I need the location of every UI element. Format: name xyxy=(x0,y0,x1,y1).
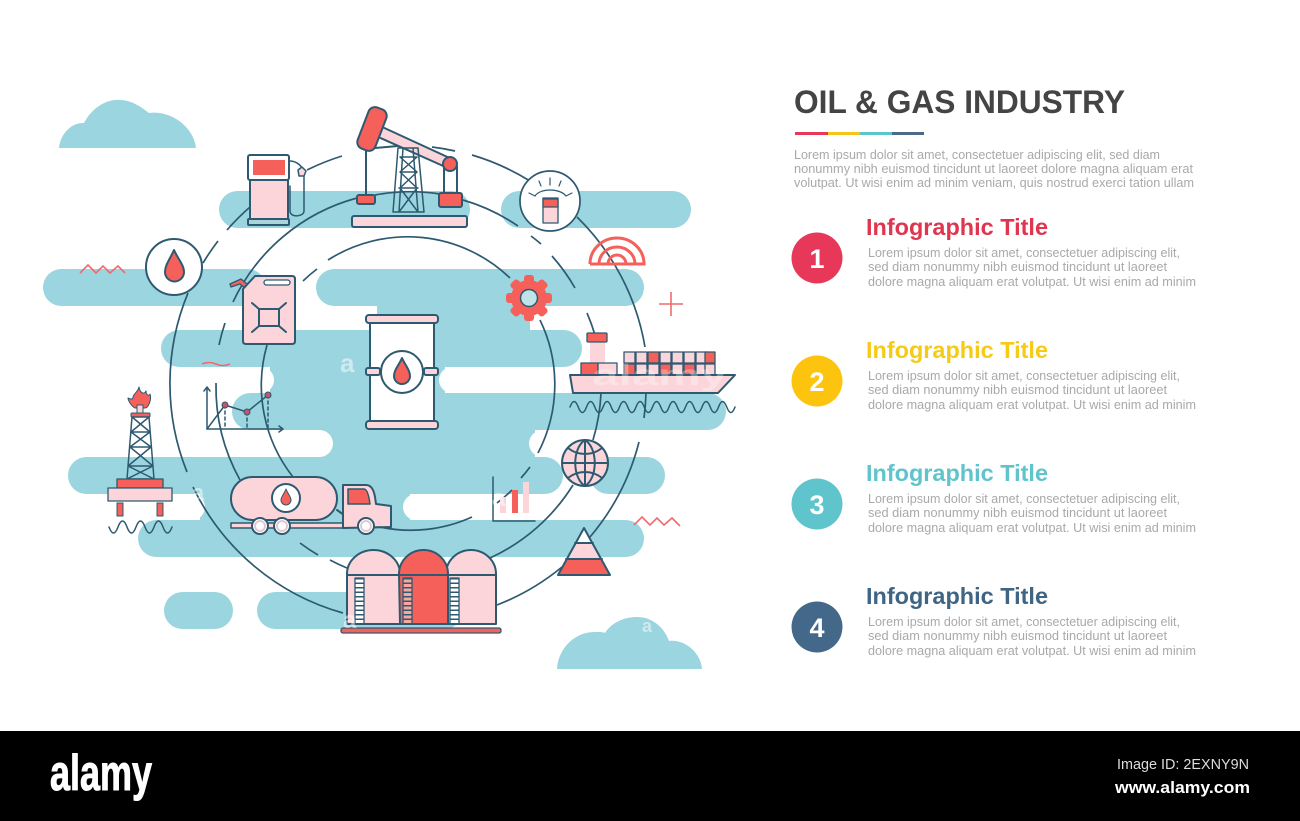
item 3: 3 xyxy=(809,490,825,520)
item 2: 2 xyxy=(809,367,825,397)
background: blue pill shapes xyxy=(43,191,739,629)
watermark marks: a xyxy=(192,480,205,505)
item 1: 1 xyxy=(809,244,825,274)
icon: water drop circle xyxy=(146,239,202,295)
icon: oil barrel xyxy=(366,315,438,429)
icon: globe xyxy=(562,440,608,486)
item 3: Infographic Title xyxy=(866,460,1048,486)
icon: tanker truck xyxy=(231,477,391,534)
item 1: Infographic Title xyxy=(866,214,1048,240)
intro paragraph: nonummy nibh euismod tincidunt ut laoreet dolore magna aliquam erat xyxy=(794,161,1193,176)
cloud: top left xyxy=(59,100,196,148)
icon: container ship xyxy=(570,333,735,412)
watermark marks: a xyxy=(343,607,357,634)
icon: signal arcs xyxy=(590,238,644,264)
icon: fuel pump xyxy=(248,155,306,225)
title: OIL & GAS INDUSTRY xyxy=(794,84,1125,120)
item 4: 4 xyxy=(809,613,825,643)
item 2 xyxy=(792,337,1196,412)
item 4: dolore magna aliquam erat volutpat. Ut wisi enim ad minim xyxy=(868,643,1196,658)
item 2: sed diam nonummy nibh euismod tincidunt ut laoreet xyxy=(868,382,1167,397)
title underline xyxy=(795,132,924,135)
icon: gauge with fuel pump xyxy=(520,171,580,231)
item 2: Infographic Title xyxy=(866,337,1048,363)
ring arcs connecting the icons xyxy=(170,147,646,613)
item 1: sed diam nonummy nibh euismod tincidunt ut laoreet xyxy=(868,259,1167,274)
item 4: Infographic Title xyxy=(866,583,1048,609)
footer band: www.alamy.com xyxy=(1114,778,1250,797)
icon: oil pumpjack xyxy=(352,105,467,227)
icon: bar chart xyxy=(493,477,535,521)
item 1: Lorem ipsum dolor sit amet, consectetuer adipiscing elit, xyxy=(868,245,1180,260)
icon: line chart xyxy=(204,387,283,432)
item 1: dolore magna aliquam erat volutpat. Ut wisi enim ad minim xyxy=(868,274,1196,289)
item 4: Lorem ipsum dolor sit amet, consectetuer adipiscing elit, xyxy=(868,614,1180,629)
watermark marks: a xyxy=(642,616,653,636)
footer band xyxy=(0,731,1300,821)
item 3: Lorem ipsum dolor sit amet, consectetuer adipiscing elit, xyxy=(868,491,1180,506)
icon: jerry can xyxy=(230,276,295,344)
icon: storage tanks xyxy=(341,550,501,633)
decorative red zigzags xyxy=(80,265,683,526)
item 2: dolore magna aliquam erat volutpat. Ut wisi enim ad minim xyxy=(868,397,1196,412)
item 4: sed diam nonummy nibh euismod tincidunt ut laoreet xyxy=(868,628,1167,643)
item 2: Lorem ipsum dolor sit amet, consectetuer adipiscing elit, xyxy=(868,368,1180,383)
intro paragraph xyxy=(794,147,1194,190)
cloud: bottom right xyxy=(557,617,702,669)
footer band: Image ID: 2EXNY9N xyxy=(1117,756,1249,773)
item 4 xyxy=(792,583,1196,658)
item 3: sed diam nonummy nibh euismod tincidunt ut laoreet xyxy=(868,505,1167,520)
footer band: alamy xyxy=(50,745,152,801)
item 1 xyxy=(792,214,1196,289)
intro paragraph: volutpat. Ut wisi enim ad minim veniam, quis nostrud exerci tation ullam xyxy=(794,175,1194,190)
icon: pyramid xyxy=(558,528,610,575)
item 3 xyxy=(792,460,1196,535)
item 3: dolore magna aliquam erat volutpat. Ut wisi enim ad minim xyxy=(868,520,1196,535)
icon: gear xyxy=(506,275,552,321)
watermark marks: a xyxy=(492,485,506,512)
watermark marks: alamy xyxy=(592,359,727,392)
intro paragraph: Lorem ipsum dolor sit amet, consectetuer adipiscing elit, sed diam xyxy=(794,147,1160,162)
watermark marks xyxy=(192,348,727,636)
icon: offshore oil rig xyxy=(108,387,172,533)
watermark marks: a xyxy=(340,348,355,378)
